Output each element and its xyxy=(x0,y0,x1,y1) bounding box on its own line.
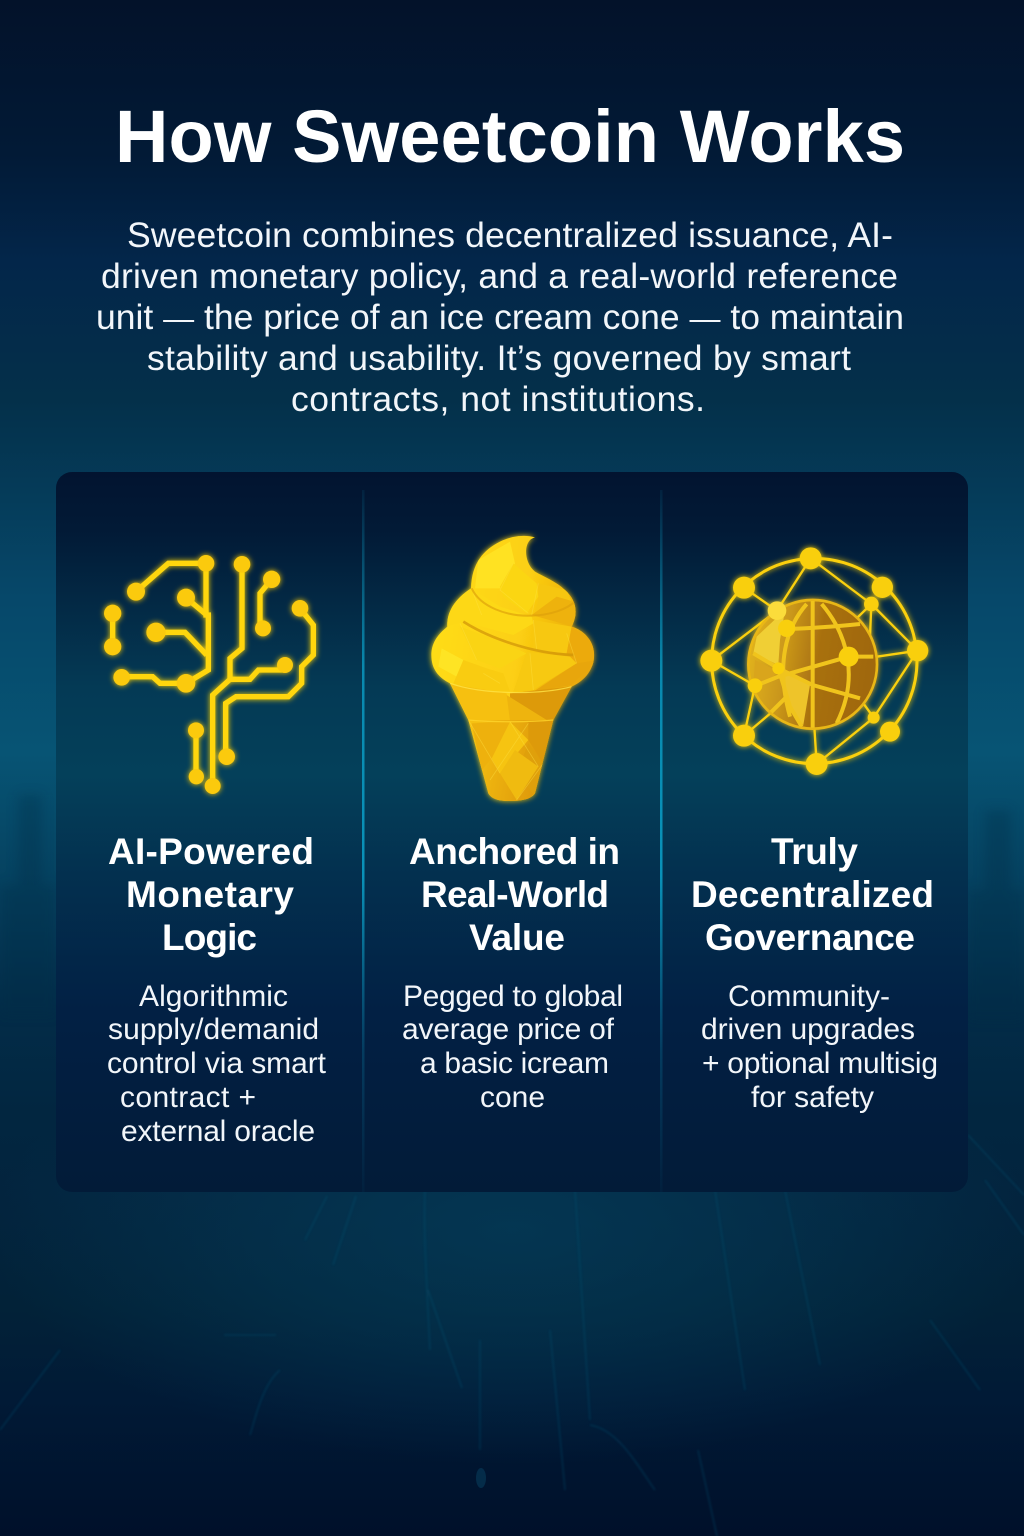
text: Anchored description: a basic icream xyxy=(420,1047,609,1080)
text: AI-Powered description: supply/demanid xyxy=(108,1013,319,1046)
title: How Sweetcoin Works xyxy=(115,95,905,178)
text: Anchored description: average price of xyxy=(402,1013,615,1046)
text: Anchored description: Pegged to global xyxy=(403,980,623,1013)
text: Decentralized description: for safety xyxy=(751,1081,874,1114)
text: Decentralized description: Community- xyxy=(728,980,890,1013)
intro text: unit — the price of an ice cream cone — to maintain xyxy=(96,297,904,337)
text: AI-Powered description: external oracle xyxy=(121,1115,315,1148)
text: Anchored description: cone xyxy=(480,1081,545,1114)
text: AI-Powered description: control via smart xyxy=(107,1047,327,1080)
heading: Anchored in Real-World Value: Anchored in xyxy=(409,831,620,872)
icon: decentralized globe network xyxy=(700,547,928,775)
heading: Truly Decentralized Governance: Truly xyxy=(771,831,858,872)
heading: Truly Decentralized Governance: Governance xyxy=(705,917,915,958)
text: Anchored description xyxy=(402,980,623,1114)
text: AI-Powered description: Algorithmic xyxy=(139,980,288,1013)
heading: AI-Powered Monetary Logic: Monetary xyxy=(126,874,294,915)
heading: Anchored in Real-World Value: Value xyxy=(469,917,565,958)
text: Decentralized description xyxy=(701,980,938,1114)
heading: AI-Powered Monetary Logic: Logic xyxy=(162,917,257,958)
heading: Anchored in Real-World Value xyxy=(409,831,620,958)
intro text xyxy=(96,215,904,419)
icon: ice cream cone xyxy=(431,536,597,803)
heading: Truly Decentralized Governance xyxy=(691,831,934,958)
text: AI-Powered description: contract + xyxy=(120,1081,256,1114)
icon: circuit brain xyxy=(104,555,313,794)
panel: three pillars xyxy=(56,472,968,1192)
heading: Anchored in Real-World Value: Real-World xyxy=(421,874,609,915)
text: AI-Powered description xyxy=(107,980,327,1148)
heading: AI-Powered Monetary Logic xyxy=(108,831,314,958)
heading: Truly Decentralized Governance: Decentralized xyxy=(691,874,934,915)
intro text: stability and usability. It’s governed by smart xyxy=(147,338,851,378)
intro text: driven monetary policy, and a real-world reference xyxy=(101,256,898,296)
text: Decentralized description: + optional multisig xyxy=(702,1047,938,1080)
intro text: contracts, not institutions. xyxy=(291,379,705,419)
text: Decentralized description: driven upgrades xyxy=(701,1013,915,1046)
intro text: Sweetcoin combines decentralized issuance, AI- xyxy=(127,215,893,255)
heading: AI-Powered Monetary Logic: AI-Powered xyxy=(108,831,314,872)
